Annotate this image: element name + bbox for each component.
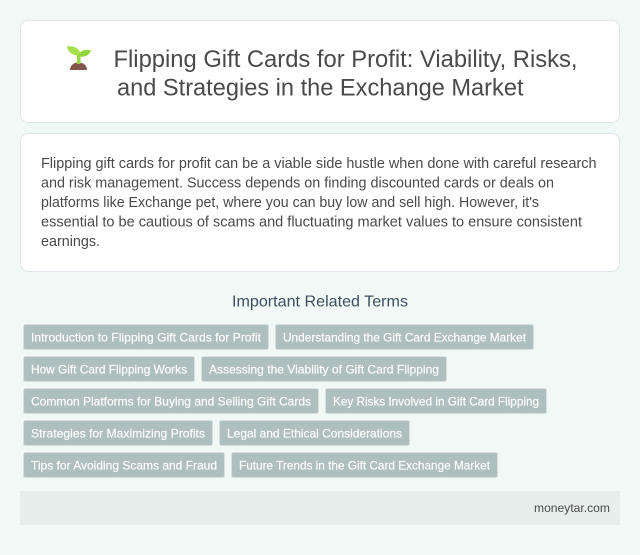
title text bbox=[114, 46, 578, 102]
footer source text: moneytar.com bbox=[534, 501, 610, 515]
tag: assessing viability: Assessing the Viability of Gift Card Flipping bbox=[209, 362, 439, 376]
tag: key risks bbox=[326, 388, 546, 414]
title text: Flipping Gift Cards for Profit: Viability, Risks, bbox=[114, 46, 578, 73]
tag: introduction bbox=[24, 324, 268, 350]
tag: understanding the market bbox=[276, 324, 534, 350]
related terms tags bbox=[24, 324, 546, 478]
tag: common platforms bbox=[24, 388, 318, 414]
tag: future trends: Future Trends in the Gift Card Exchange Market bbox=[239, 458, 491, 472]
description text bbox=[41, 156, 596, 250]
title text: and Strategies in the Exchange Market bbox=[117, 74, 524, 102]
tag: legal and ethical: Legal and Ethical Considerations bbox=[227, 426, 402, 440]
tag: strategies: Strategies for Maximizing Profits bbox=[31, 426, 205, 440]
tag: avoiding scams: Tips for Avoiding Scams and Fraud bbox=[31, 458, 217, 472]
description text: Flipping gift cards for profit can be a viable side hustle when done with careful research bbox=[41, 156, 596, 172]
description text: essential to be cautious of scams and fluctuating market values to ensure consistent bbox=[41, 214, 582, 230]
tag: introduction: Introduction to Flipping Gift Cards for Profit bbox=[31, 330, 262, 344]
panel: description bbox=[20, 134, 620, 272]
tag: avoiding scams bbox=[24, 452, 224, 478]
description text: and risk management. Success depends on finding discounted cards or deals on bbox=[41, 176, 554, 192]
panel: title bbox=[20, 20, 620, 122]
tag: legal and ethical bbox=[220, 420, 410, 446]
tag: strategies bbox=[24, 420, 212, 446]
tag: understanding the market: Understanding the Gift Card Exchange Market bbox=[283, 330, 527, 344]
tag: assessing viability bbox=[202, 356, 446, 382]
tag: future trends bbox=[232, 452, 498, 478]
tag: how flipping works: How Gift Card Flipping Works bbox=[31, 362, 187, 376]
description text: earnings. bbox=[41, 234, 100, 250]
heading: important related terms: Important Related Terms bbox=[232, 294, 408, 310]
tag: how flipping works bbox=[24, 356, 194, 382]
tag: common platforms: Common Platforms for Buying and Selling Gift Cards bbox=[31, 394, 311, 408]
tag: key risks: Key Risks Involved in Gift Card Flipping bbox=[333, 394, 539, 408]
description text: platforms like Exchange pet, where you can buy low and sell high. However, it's bbox=[41, 195, 539, 211]
footer bbox=[20, 491, 620, 525]
icon: seedling bbox=[67, 46, 91, 70]
